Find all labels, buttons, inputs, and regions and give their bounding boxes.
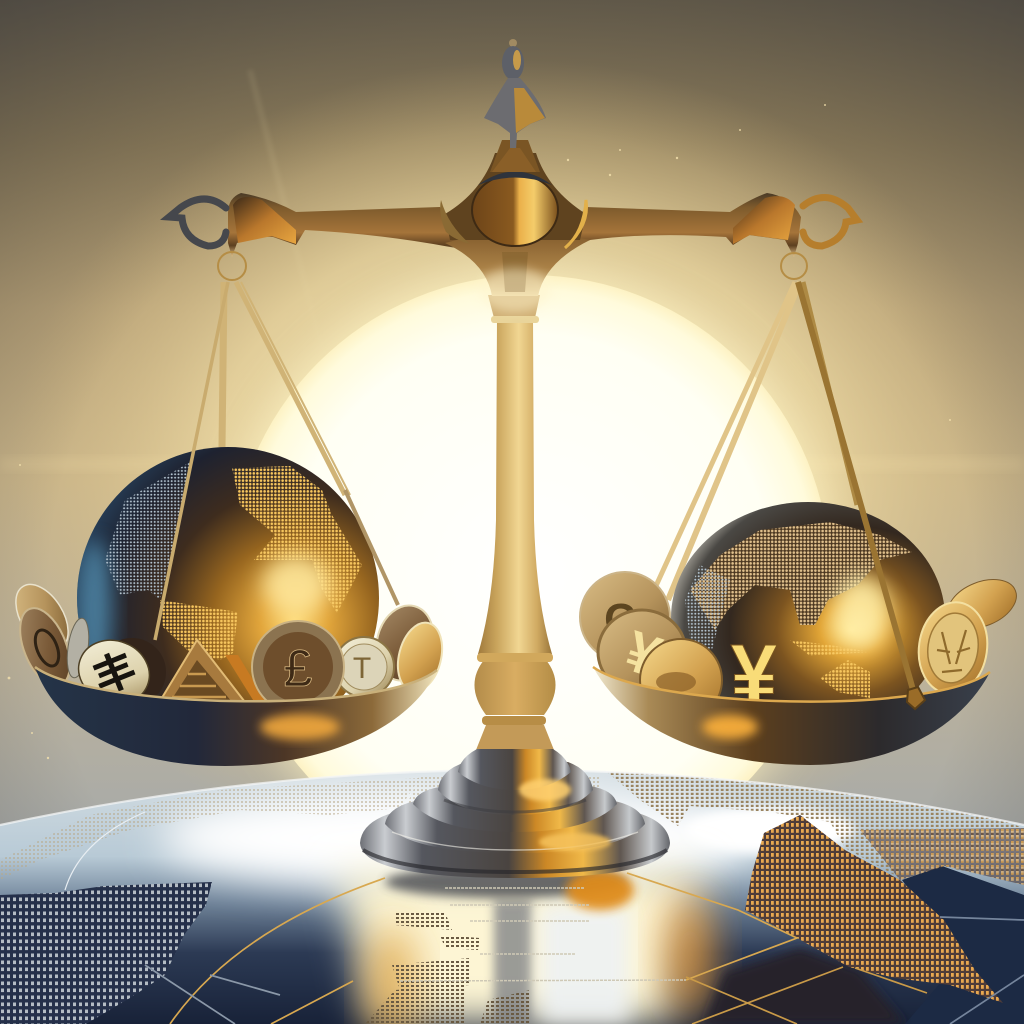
cone of light <box>340 870 700 1024</box>
face coin <box>913 598 993 698</box>
continent: upper right orange <box>745 815 1003 1003</box>
indonesia dots <box>790 640 870 656</box>
silver coin T: T <box>353 652 371 685</box>
left chain lower <box>345 490 398 605</box>
yen symbol: ¥ <box>731 627 778 721</box>
lower earth globe with dotted continents <box>0 770 1024 1024</box>
left globe <box>77 447 379 700</box>
coin with hook symbol <box>580 572 670 662</box>
left chains back <box>218 252 350 495</box>
column shaft <box>478 318 552 654</box>
central fan and shoulders <box>445 153 586 240</box>
pale coin with glyph: 丰 <box>86 644 143 703</box>
continent: lower left <box>0 882 212 1024</box>
silver coin T <box>334 637 394 697</box>
dark sea lower right <box>705 948 905 1024</box>
neck below medallion <box>445 225 590 296</box>
continent: upper right sparse <box>607 772 1024 880</box>
continent: far right <box>860 828 1024 885</box>
neck bloom <box>479 268 551 312</box>
eagle coin <box>640 639 722 721</box>
pale coin with glyph <box>69 630 159 714</box>
dark coin behind pale coin <box>98 638 166 706</box>
centre map fragments <box>365 912 530 1024</box>
spiral coin <box>10 601 80 693</box>
large coin centre <box>252 621 344 713</box>
continent: upper centre left <box>409 777 599 802</box>
shadow under base <box>385 866 625 898</box>
earth rim <box>0 770 1024 825</box>
right globe <box>671 502 944 700</box>
blue sheen <box>77 540 113 680</box>
coin with hook symbol: C <box>604 595 636 644</box>
orange stick <box>225 655 270 708</box>
right hook <box>803 197 857 246</box>
medallion <box>472 174 558 246</box>
back coin right <box>369 599 441 687</box>
base tier 3 <box>413 786 617 832</box>
scale stand <box>360 295 670 878</box>
balance beam <box>169 39 857 312</box>
left arm <box>228 193 470 257</box>
right pan <box>593 667 990 765</box>
right gold coin <box>391 618 449 696</box>
left pan <box>35 667 437 766</box>
longitude lines <box>65 812 1024 1024</box>
crescent horns <box>440 200 470 244</box>
capital <box>488 295 540 318</box>
base tier 2 <box>438 762 593 815</box>
left hook <box>169 199 226 246</box>
right arm <box>555 193 801 257</box>
right chains back <box>655 253 857 600</box>
glowing sun disc <box>226 271 834 879</box>
knop textured <box>474 660 556 715</box>
blue ribbed area <box>685 565 730 650</box>
dark sea right <box>902 866 1024 1024</box>
back coin top left <box>5 575 79 659</box>
asia dots <box>690 522 912 630</box>
finial figure <box>484 39 546 172</box>
base tier 1 <box>458 749 571 790</box>
coin with slanted yen <box>598 610 686 694</box>
right chain front <box>798 282 925 709</box>
triangle token <box>157 640 248 706</box>
back coin far right <box>940 570 1024 638</box>
left coins <box>5 575 449 714</box>
left chain front <box>155 282 228 640</box>
column and collars <box>474 318 556 750</box>
continent: upper left sparse <box>0 778 420 880</box>
coin with slanted yen: ¥ <box>618 618 669 690</box>
centre grey streak <box>494 900 532 1024</box>
africa dots <box>232 466 362 613</box>
americas dots <box>105 462 190 600</box>
large coin centre: £ <box>284 640 313 698</box>
base tier 5 <box>360 810 670 878</box>
narrow silver coin <box>64 617 92 679</box>
light ocean glow <box>160 786 760 890</box>
base tier 4 <box>385 800 645 853</box>
australia dots <box>820 660 870 698</box>
south america dots <box>160 600 238 660</box>
right coins <box>580 570 1024 721</box>
